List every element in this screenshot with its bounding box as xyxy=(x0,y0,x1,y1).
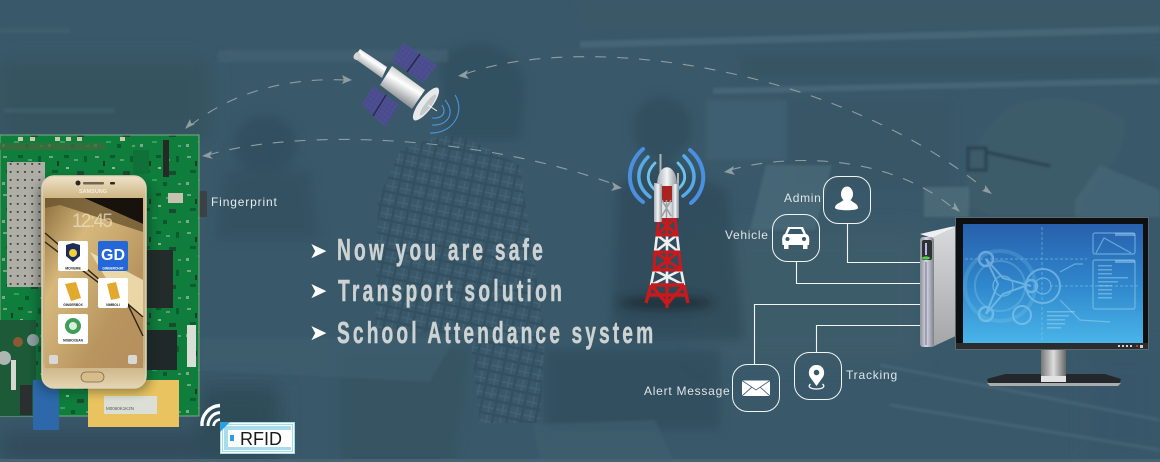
satellite body xyxy=(352,49,443,124)
desktop monitor xyxy=(956,218,1148,386)
monitor screen xyxy=(963,224,1143,348)
rfid badge xyxy=(220,422,295,454)
app: mobiocean xyxy=(58,314,88,344)
blue connector xyxy=(33,380,59,430)
yellow label xyxy=(88,380,179,427)
app: moveme: MOVEME xyxy=(65,266,81,270)
app: gingerbox: GINGERBOX xyxy=(63,303,84,307)
tower signal waves xyxy=(630,149,703,203)
label: fingerprint: Fingerprint xyxy=(211,195,278,209)
monitor bezel xyxy=(956,218,1148,350)
tower mast head xyxy=(654,154,679,222)
rfid badge: RFID xyxy=(240,429,282,449)
app: mobiocean: MOBIOCEAN xyxy=(63,338,84,342)
phone screen xyxy=(45,198,143,368)
fingerprint connector block xyxy=(199,191,207,217)
plaid shirt xyxy=(375,136,545,423)
app: gingerchat: GD xyxy=(101,247,125,264)
satellite xyxy=(352,43,459,133)
icon: admin xyxy=(824,176,870,224)
yellow label: M0060K1K2N xyxy=(106,406,134,411)
label: vehicle: Vehicle xyxy=(725,228,769,242)
brand: SAMSUNG xyxy=(79,189,107,195)
app: nimboli: NIMBOLI xyxy=(106,303,120,307)
icon: alert message xyxy=(732,364,780,412)
app: gingerchat: GINGERCHAT xyxy=(102,266,124,270)
monitor status dots xyxy=(1118,345,1143,348)
headline: now you are safe: Now you are safe xyxy=(337,234,543,267)
headline: transport solution: ➤ xyxy=(309,279,327,304)
app: gingerbox xyxy=(58,278,88,308)
headline: transport solution: Transport solution xyxy=(338,275,562,308)
phone camera and speaker xyxy=(76,180,80,186)
app: moveme xyxy=(58,241,88,271)
headline: now you are safe: ➤ xyxy=(309,239,327,264)
label: alert message: Alert Message xyxy=(644,384,730,398)
label: admin: Admin xyxy=(784,191,822,205)
connector lines from icons to server xyxy=(754,223,920,365)
phone home button xyxy=(81,372,104,382)
tower lattice xyxy=(646,218,688,308)
cell tower xyxy=(618,149,714,310)
icon: tracking xyxy=(794,352,842,400)
server tower xyxy=(920,226,958,347)
headline: school attendance system: School Attendance system xyxy=(337,317,653,350)
monitor stand xyxy=(987,348,1121,386)
dashed signal arcs between devices xyxy=(190,57,986,208)
arrowheads on the signal arcs xyxy=(185,70,992,212)
headline list xyxy=(309,234,653,350)
smartphone xyxy=(38,176,150,392)
satellite signal waves xyxy=(430,95,459,133)
icon: wireless signal xyxy=(202,406,220,426)
satellite solar panels xyxy=(362,43,437,127)
label: tracking: Tracking xyxy=(846,368,898,382)
clock: 12:45 xyxy=(72,211,113,232)
app: gingerchat xyxy=(98,241,128,271)
headline: school attendance system: ➤ xyxy=(309,321,327,346)
circuit board xyxy=(0,135,199,416)
phone shortcuts xyxy=(49,355,58,364)
woman with glasses xyxy=(965,99,1125,215)
app: nimboli xyxy=(98,278,128,308)
icon: vehicle xyxy=(772,214,820,262)
